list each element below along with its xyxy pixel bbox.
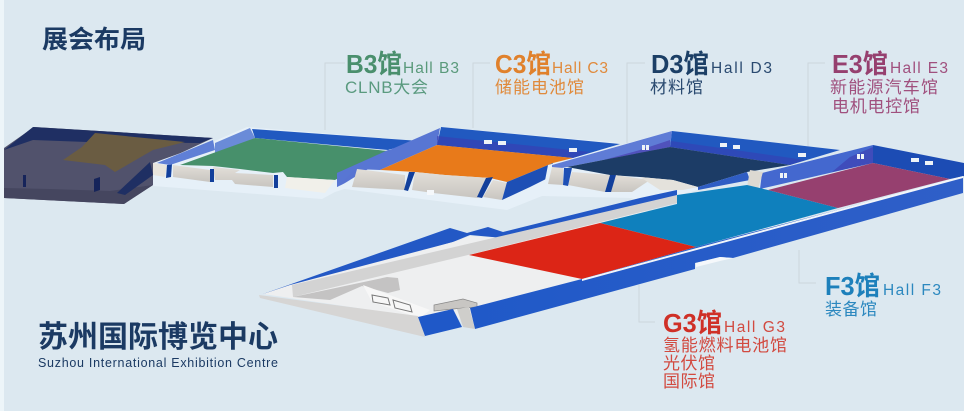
hall D3: navy	[542, 131, 840, 205]
venue name	[38, 321, 278, 370]
long hall: blue back wall	[263, 190, 677, 294]
label F3: Hall F3	[883, 282, 941, 299]
label C3: Hall C3	[552, 60, 608, 77]
label D3: 材料馆	[650, 78, 703, 97]
hall E3 back wall	[747, 145, 964, 189]
label D3: Hall D3	[711, 60, 772, 77]
label G3	[663, 308, 787, 391]
label G3: 国际馆	[663, 372, 715, 391]
label B3: Hall B3	[403, 60, 459, 77]
title: layout: 展会布局	[42, 26, 146, 54]
long hall: grey inner wall	[292, 195, 677, 318]
label E3: E3馆	[832, 49, 888, 79]
label G3: 氢能燃料电池馆	[663, 336, 787, 355]
hall C3: orange	[337, 127, 620, 210]
label F3: F3馆	[825, 271, 880, 301]
label C3	[495, 49, 608, 97]
label E3	[830, 49, 948, 116]
label F3	[825, 271, 941, 319]
venue name: Suzhou International Exhibition Centre	[38, 356, 278, 370]
long hall: white floor G3	[263, 205, 700, 320]
label B3	[345, 49, 459, 97]
notch	[696, 257, 733, 267]
label D3: D3馆	[651, 49, 709, 79]
label B3: B3馆	[346, 49, 402, 79]
floor G3: red	[469, 223, 696, 279]
label G3: 光伏馆	[663, 354, 715, 373]
long hall: front-right blue wall	[470, 177, 963, 329]
floor E3: purple	[768, 163, 950, 208]
leader lines	[325, 63, 825, 322]
label B3: CLNB大会	[345, 78, 428, 97]
front blue block	[418, 309, 462, 336]
white edge line	[582, 176, 963, 281]
label G3: Hall G3	[724, 319, 785, 336]
label C3: C3馆	[495, 49, 551, 79]
hall B3: green	[153, 127, 420, 199]
label E3: 电机电控馆	[832, 97, 920, 116]
entrance gap	[457, 307, 475, 329]
label D3	[650, 49, 772, 97]
venue name: 苏州国际博览中心	[38, 321, 278, 354]
hall A: dark building	[4, 127, 213, 204]
label G3: G3馆	[663, 308, 722, 338]
label F3: 装备馆	[825, 300, 877, 319]
label E3: 新能源汽车馆	[830, 78, 938, 97]
long hall: grey front wall	[259, 295, 425, 337]
label C3: 储能电池馆	[495, 78, 584, 97]
label E3: Hall E3	[890, 60, 948, 77]
floor F3: blue	[600, 185, 838, 247]
